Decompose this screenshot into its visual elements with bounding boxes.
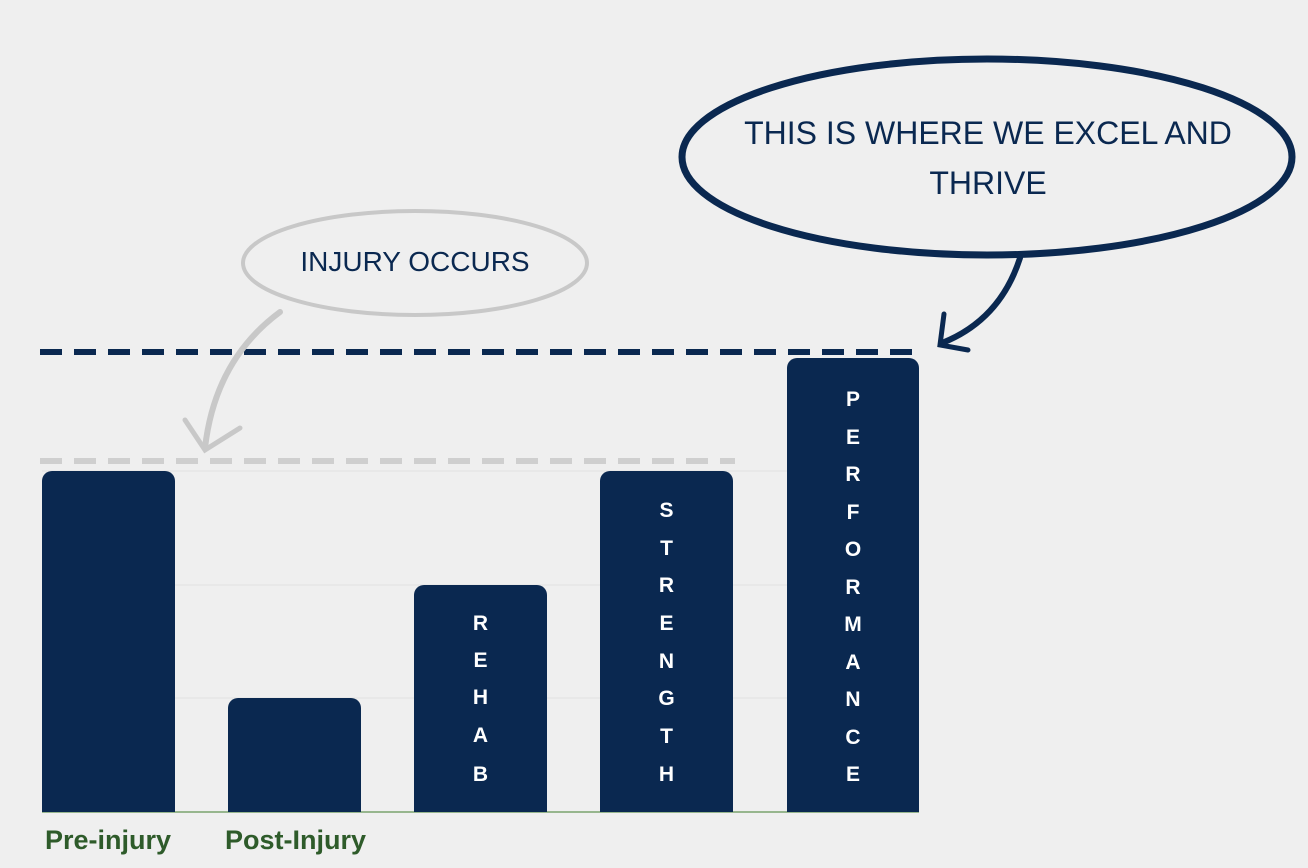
bar: rehab: B	[473, 763, 488, 786]
bar: performance: E	[846, 763, 860, 786]
bar: rehab	[414, 585, 547, 812]
bar: performance: O	[845, 538, 861, 561]
bar: performance: P	[846, 388, 860, 411]
bar: performance: R	[845, 576, 861, 599]
bar: strength: E	[659, 612, 674, 635]
bar: rehab: H	[473, 686, 488, 709]
bar: performance: N	[845, 688, 861, 711]
bar: strength: T	[660, 725, 673, 748]
bar: performance: R	[845, 463, 861, 486]
bar: strength: R	[659, 574, 674, 597]
label: post-injury: Post-Injury	[225, 825, 366, 855]
bar: performance: F	[847, 501, 859, 524]
bar: strength: S	[659, 499, 674, 522]
bar: rehab: A	[473, 724, 488, 747]
bar: strength: T	[660, 537, 673, 560]
callout: excel and thrive: THIS IS WHERE WE EXCEL AND	[744, 115, 1232, 151]
bar: performance: A	[845, 651, 861, 674]
bar: strength: H	[659, 763, 674, 786]
callout: injury occurs	[241, 209, 589, 317]
bar: performance: C	[845, 726, 861, 749]
bar: rehab: E	[473, 649, 488, 672]
bar: pre-injury	[42, 471, 175, 812]
bar: performance: M	[844, 613, 862, 636]
bar: performance	[787, 358, 919, 812]
callout: excel and thrive: THRIVE	[929, 165, 1047, 201]
label: pre-injury: Pre-injury	[45, 825, 171, 855]
bar: rehab: R	[473, 612, 488, 635]
callout: injury occurs: INJURY OCCURS	[300, 246, 530, 277]
callout: excel and thrive	[678, 56, 1296, 258]
bar: strength: G	[658, 687, 675, 710]
bar: strength: N	[659, 650, 674, 673]
bar: strength	[600, 471, 733, 812]
bar: post-injury	[228, 698, 361, 812]
bar: performance: E	[846, 426, 860, 449]
